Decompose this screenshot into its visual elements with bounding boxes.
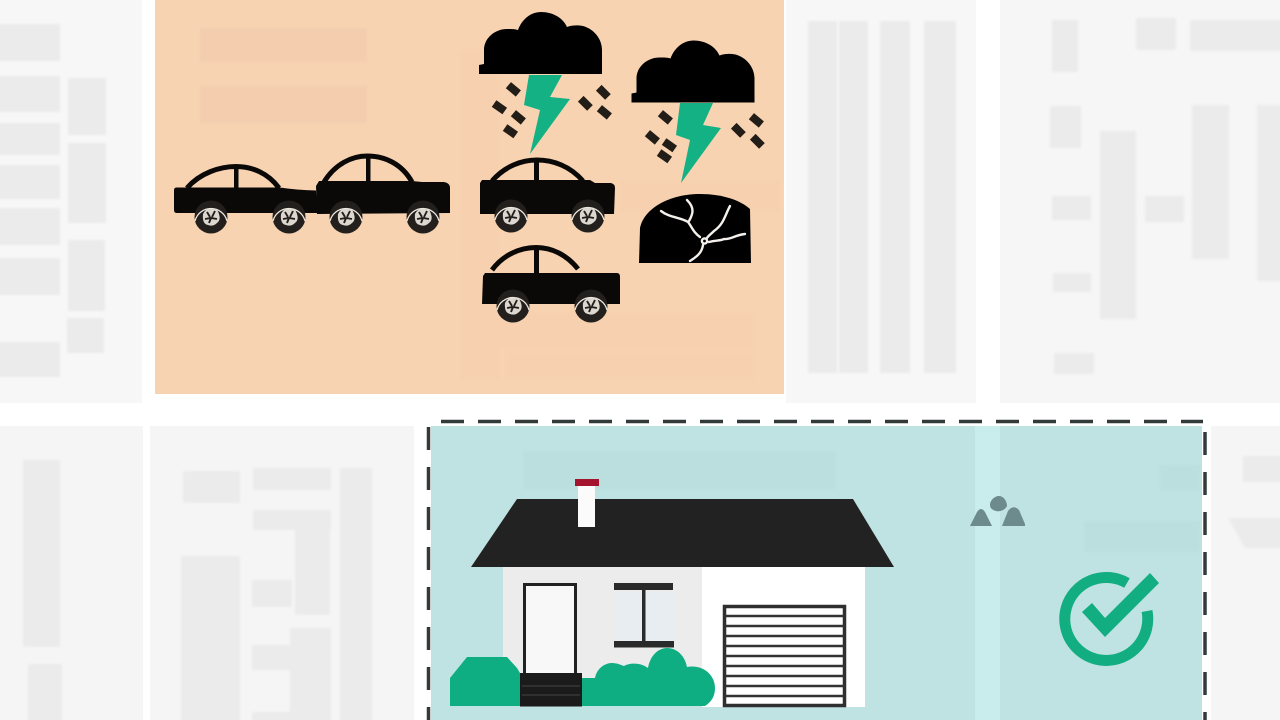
faded text bars (523, 451, 1200, 552)
panel: top left faded (0, 0, 142, 403)
rain dashes one (492, 82, 612, 138)
panel: bottom right faded (1211, 426, 1280, 720)
icon: lightning bolt one (524, 75, 570, 154)
door (524, 584, 576, 676)
rain dashes two (645, 110, 765, 163)
icon: storm cloud two (632, 40, 765, 183)
left bush (450, 657, 520, 706)
icon: storm cloud one (479, 12, 612, 154)
icon: dented car (480, 159, 615, 232)
chimney cap (575, 479, 599, 486)
window (614, 583, 674, 648)
panel: top right faded column block (786, 0, 976, 403)
icon: green check mark (1065, 573, 1159, 660)
right bush (582, 648, 715, 706)
faded text column (460, 50, 780, 380)
panel: peach storm damage (155, 0, 784, 394)
panel: bottom left faded (0, 426, 414, 720)
steps (520, 673, 582, 706)
icon: rear-ended car (174, 166, 318, 234)
icon: car with bent roof (482, 247, 620, 322)
house walls (503, 567, 865, 707)
heading placeholder bars (200, 28, 367, 123)
icon: front car in collision (316, 155, 450, 234)
icon: cracked windshield (639, 194, 751, 263)
chimney (578, 486, 595, 527)
icon: house (450, 479, 894, 707)
icon: rocks (970, 496, 1025, 526)
panel: teal safe home (428, 422, 1205, 720)
icon: lightning bolt two (676, 103, 721, 183)
panel: far right faded (1000, 0, 1280, 403)
garage door (724, 606, 845, 706)
dashed outline (428, 422, 1205, 720)
roof (471, 499, 894, 567)
